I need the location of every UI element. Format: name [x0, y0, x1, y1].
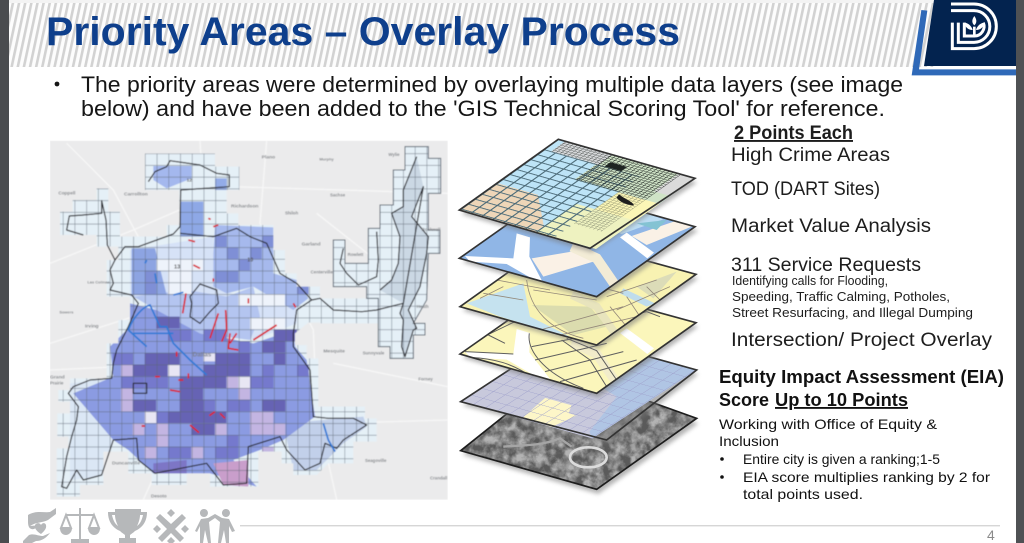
map place labels: Rowlett: [348, 252, 364, 257]
text panel: equity impact assessment: total points used.: [743, 486, 863, 502]
text panel: 2 points each: Market Value Analysis: [731, 216, 931, 237]
map place labels: Coppell: [58, 190, 75, 195]
city boundary outline: [62, 157, 428, 488]
map place labels: Irving: [85, 324, 99, 330]
map place labels: Sowers: [59, 310, 74, 315]
layer: cream parcels with roads: [458, 309, 698, 399]
map place labels: Rockwall: [422, 227, 440, 232]
map place labels: Seagoville: [365, 458, 387, 463]
map place labels: Richardson: [231, 203, 258, 209]
text panel: equity impact assessment: [719, 366, 1004, 502]
icon: trophy: [108, 509, 147, 543]
bullet text: The priority areas were determined by overlaying multiple data layers (see image: [81, 72, 903, 97]
blue stream lines: [128, 260, 335, 452]
logo: [912, 0, 1016, 75]
text panel: 2 points each: Street Resurfacing, and Illegal Dumping: [732, 306, 973, 320]
map place labels: Wylie: [388, 152, 400, 157]
map place labels: Las Colinas: [87, 280, 110, 285]
icon: Dallas D mark: [951, 4, 996, 49]
text panel: 2 points each: High Crime Areas: [731, 145, 890, 166]
layered GIS stack illustration: [459, 139, 698, 494]
map place labels: 10: [247, 257, 253, 263]
bullet text: below) and have been added to the 'GIS Technical Scoring Tool' for reference.: [81, 96, 885, 121]
map place labels: [50, 152, 447, 499]
heading: 2 points each: 2 Points Each: [734, 123, 853, 144]
map place labels: Dallas: [193, 352, 212, 359]
map place labels: Heath: [417, 304, 429, 309]
text panel: 2 points each: TOD (DART Sites): [731, 179, 880, 200]
map place labels: 13: [174, 264, 180, 270]
text panel: 2 points each: [731, 123, 993, 351]
map place labels: Crandall: [430, 475, 447, 480]
title: Priority Areas – Overlay Process: [46, 10, 680, 54]
map place labels: Forney: [418, 376, 433, 381]
icon: scales: [60, 508, 100, 543]
header band: [9, 0, 934, 67]
text panel: 2 points each: Identifying calls for Flooding,: [732, 274, 888, 288]
layer: blue water with roads: [458, 212, 698, 302]
map place labels: Plano: [262, 154, 275, 160]
map place labels: Sunnyvale: [363, 351, 385, 356]
footer rule: [240, 525, 1000, 526]
text panel: equity impact assessment: Inclusion: [719, 433, 779, 449]
text panel: equity impact assessment: Working with Office of Equity &: [719, 416, 938, 432]
map place labels: Desoto: [151, 494, 167, 499]
layer: parcels grid: [461, 333, 698, 444]
text panel: equity impact assessment: EIA score multiplies ranking by 2 for: [743, 469, 990, 485]
map place labels: Grand: [50, 374, 65, 380]
icon: two people: [195, 509, 235, 543]
text panel: 2 points each: Speeding, Traffic Calming, Potholes,: [732, 290, 950, 304]
text panel: 2 points each: Intersection/ Project Overlay: [731, 330, 993, 351]
map place labels: Murphy: [319, 157, 335, 162]
map place labels: Shiloh: [285, 211, 299, 216]
page number: 4: [987, 527, 995, 543]
icon: interlocking star: [153, 509, 189, 543]
map place labels: Mesquite: [323, 348, 345, 354]
layer: detailed parcels: [458, 260, 698, 351]
heading: EIA: Equity Impact Assessment (EIA): [719, 366, 1004, 387]
icon: hands and heart: [23, 508, 56, 543]
map place labels: Prairie: [50, 380, 64, 385]
red project lines: [142, 218, 296, 433]
map place labels: 12: [187, 178, 192, 184]
layer: street map: [459, 139, 697, 252]
map place labels: Duncanville: [112, 460, 140, 466]
map place labels: Carrollton: [124, 191, 148, 197]
layer: satellite image: [459, 400, 699, 496]
map: Dallas priority areas: [50, 141, 448, 500]
footer icons: [23, 508, 235, 543]
city grid footprint: [50, 141, 383, 500]
map place labels: Garland: [302, 241, 321, 247]
text panel: equity impact assessment: Up to 10 Points: [775, 389, 908, 410]
text panel: equity impact assessment: Entire city is given a ranking;1-5: [743, 451, 940, 467]
text panel: equity impact assessment: Score: [719, 389, 769, 410]
map place labels: Sachse: [330, 192, 346, 197]
bullet text: [55, 72, 903, 121]
text panel: 2 points each: 311 Service Requests: [731, 255, 921, 276]
map place labels: Centerville: [311, 269, 333, 274]
east lake area grid: [333, 147, 441, 358]
